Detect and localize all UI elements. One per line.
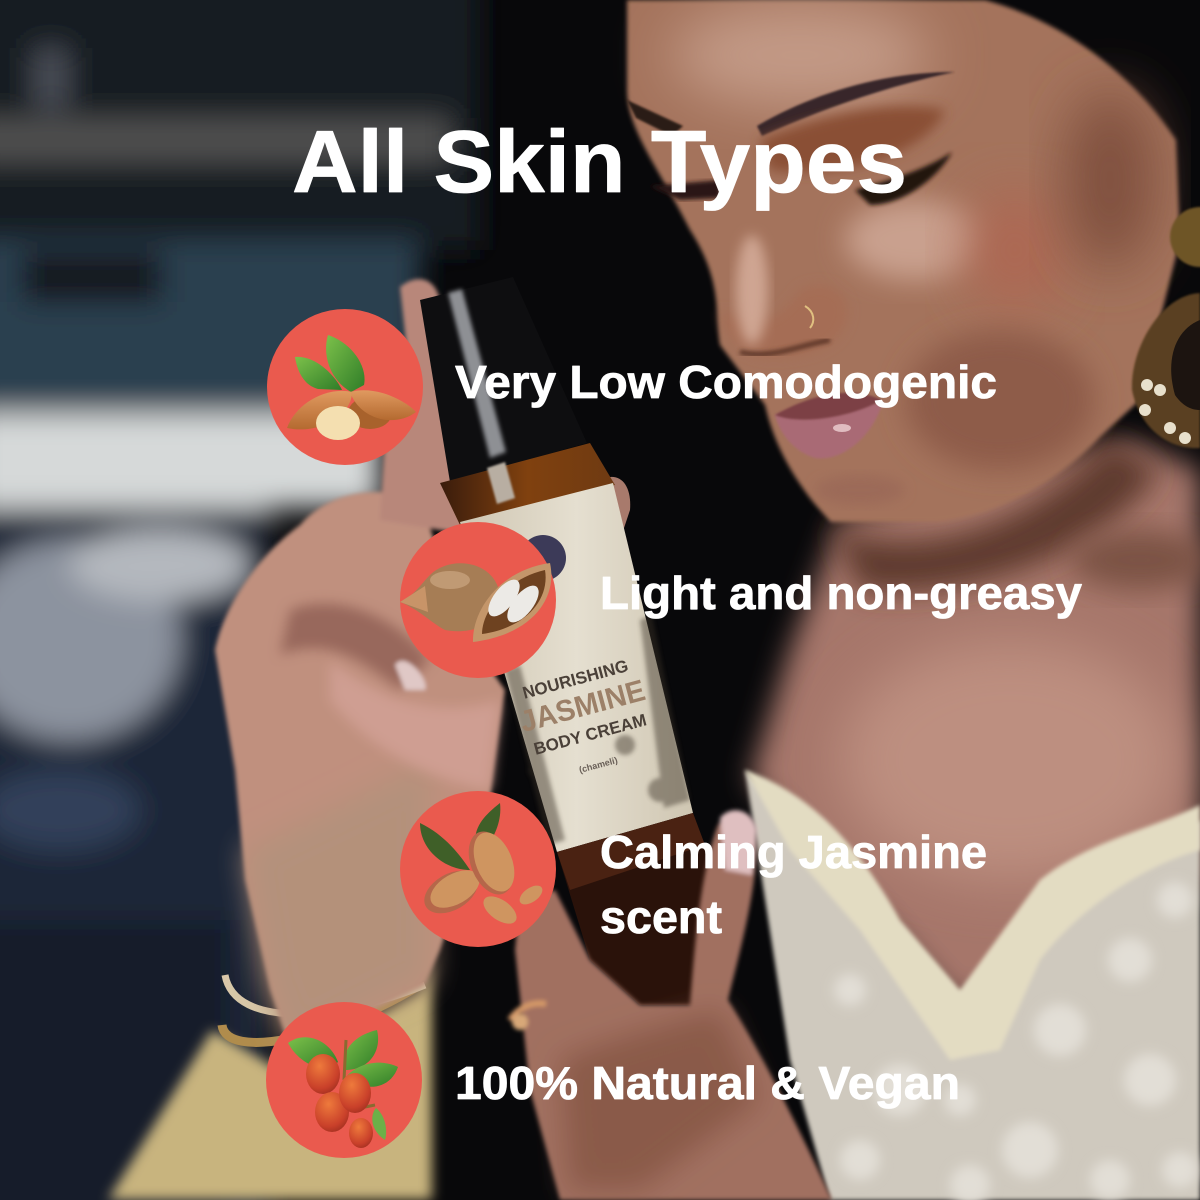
- photo: product bottle: [420, 277, 725, 1005]
- icon: shea nuts: [400, 522, 556, 678]
- icon: rosehip berries: [266, 1002, 422, 1158]
- photo: far finger behind bottle: [600, 477, 630, 540]
- label: calming jasmine scent: [600, 826, 987, 943]
- right eyebrow: [757, 72, 955, 136]
- amber neck: [440, 443, 615, 525]
- photo: neck and chest: [750, 440, 1200, 1010]
- left eyebrow and eye: [627, 100, 683, 136]
- lower bottle: [557, 813, 725, 1005]
- label: very low comodogenic: Very Low Comodogenic: [455, 356, 997, 408]
- label text: NOURISHING: [520, 656, 630, 703]
- eyeshadow: [760, 106, 945, 172]
- title: All Skin Types: [292, 112, 907, 211]
- lips: [775, 401, 882, 458]
- feature 3: apricot kernels: [400, 791, 987, 947]
- feature 2: shea nut: [400, 522, 1082, 678]
- photo: woman face: [627, 0, 1180, 522]
- blouse lace: [834, 882, 1198, 1200]
- label text: [511, 654, 661, 786]
- label: [460, 483, 693, 852]
- label text: JASMINE: [517, 674, 649, 739]
- photo: left hand: [215, 279, 505, 1050]
- label text: (chameli): [578, 755, 619, 775]
- label: calming jasmine scent: Calming Jasmine: [600, 826, 987, 878]
- label florals: [505, 615, 690, 845]
- nose: [722, 285, 848, 357]
- label logo: [520, 535, 566, 581]
- photo: right earring: [1132, 207, 1200, 448]
- feature 1: almonds: [267, 309, 997, 465]
- bottle cap: [420, 277, 587, 482]
- photo: blouse: [745, 770, 1200, 1200]
- ring: [510, 1003, 546, 1020]
- photo: lower right hand: [510, 810, 832, 1200]
- feature 4: rosehip: [266, 1002, 960, 1158]
- icon: almonds and leaves: [267, 309, 423, 465]
- photo: sleeve and bracelet: [108, 960, 432, 1200]
- label: calming jasmine scent: scent: [600, 891, 722, 943]
- nose ring: [805, 306, 813, 328]
- label text: BODY CREAM: [532, 710, 649, 759]
- label: light and non-greasy: Light and non-greasy: [600, 567, 1082, 619]
- eye lashes: [855, 152, 952, 205]
- icon: kernels and leaves: [400, 791, 556, 947]
- label: 100% natural and vegan: 100% Natural & Vegan: [455, 1057, 960, 1109]
- blouse collar: [745, 770, 1200, 1060]
